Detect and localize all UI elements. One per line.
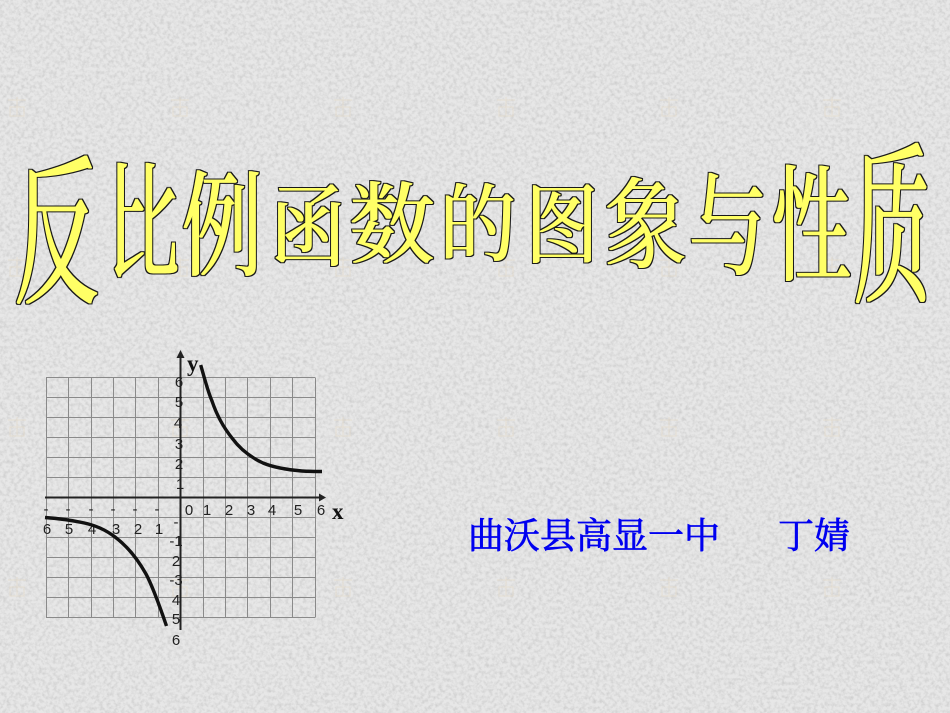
y tick numbers: 2 <box>175 456 183 473</box>
title: arched word-art text: 数 <box>350 176 434 275</box>
x tick numbers: 5 <box>65 521 73 538</box>
x tick numbers: 3 <box>112 521 120 538</box>
x tick numbers: - <box>44 501 48 518</box>
axis labels: y <box>187 351 199 376</box>
x tick numbers: 2 <box>134 521 142 538</box>
x tick numbers: 0 <box>185 502 193 519</box>
title: arched word-art text: 性 <box>772 158 851 298</box>
y tick numbers: 5 <box>172 611 180 628</box>
author: school and name: 丁婧 <box>778 516 850 556</box>
y tick numbers: 1 <box>176 476 184 493</box>
axis labels <box>187 351 344 524</box>
y tick numbers: -1 <box>169 533 183 550</box>
x tick numbers: 6 <box>317 502 325 519</box>
x tick numbers: 4 <box>268 502 276 519</box>
y tick numbers: -3 <box>169 572 183 589</box>
x tick numbers: 2 <box>225 502 233 519</box>
title: arched word-art text: 函 <box>271 179 345 278</box>
y tick numbers: 5 <box>175 394 183 411</box>
x tick numbers: - <box>132 501 138 518</box>
chart: inverse proportion graph <box>43 350 344 649</box>
y tick numbers: 6 <box>172 632 180 649</box>
x tick numbers: - <box>66 501 70 518</box>
x tick numbers: 3 <box>247 502 255 519</box>
x tick numbers: - <box>154 501 160 518</box>
author: school and name: 曲沃县高显一中 <box>468 516 720 556</box>
title: arched word-art text: 比 <box>107 155 179 297</box>
y tick numbers: - <box>174 514 178 531</box>
curve: third quadrant branch <box>45 518 166 626</box>
x tick numbers <box>43 501 325 538</box>
x tick numbers: 5 <box>294 502 302 519</box>
x tick numbers: 1 <box>155 521 163 538</box>
title: arched word-art text: 反 <box>14 146 99 327</box>
title: arched word-art text: 质 <box>854 135 930 328</box>
x tick numbers: 4 <box>88 521 96 538</box>
y tick numbers: 6 <box>175 374 183 391</box>
x tick numbers: 6 <box>43 521 51 538</box>
grid lines <box>46 378 316 618</box>
y axis <box>176 350 184 630</box>
curve: first quadrant branch <box>201 365 322 472</box>
x tick numbers: 1 <box>203 502 211 519</box>
x axis <box>45 494 326 502</box>
y tick numbers <box>169 374 184 649</box>
y tick numbers: 3 <box>175 436 183 453</box>
title: arched word-art text: 与 <box>689 168 767 290</box>
y tick numbers: 2 <box>172 553 180 570</box>
title: arched word-art text: 象 <box>605 172 686 282</box>
y tick numbers: 4 <box>174 415 182 432</box>
x tick numbers: - <box>110 501 116 518</box>
title: arched word-art text: 的 <box>440 179 516 273</box>
title: arched word-art text: 例 <box>182 166 262 292</box>
title: arched word-art text: 图 <box>526 180 598 276</box>
author: school and name <box>468 516 850 556</box>
title: arched word-art text <box>14 135 930 328</box>
y tick numbers: 4 <box>172 592 180 609</box>
x tick numbers: - <box>88 501 94 518</box>
axis labels: x <box>332 499 344 524</box>
